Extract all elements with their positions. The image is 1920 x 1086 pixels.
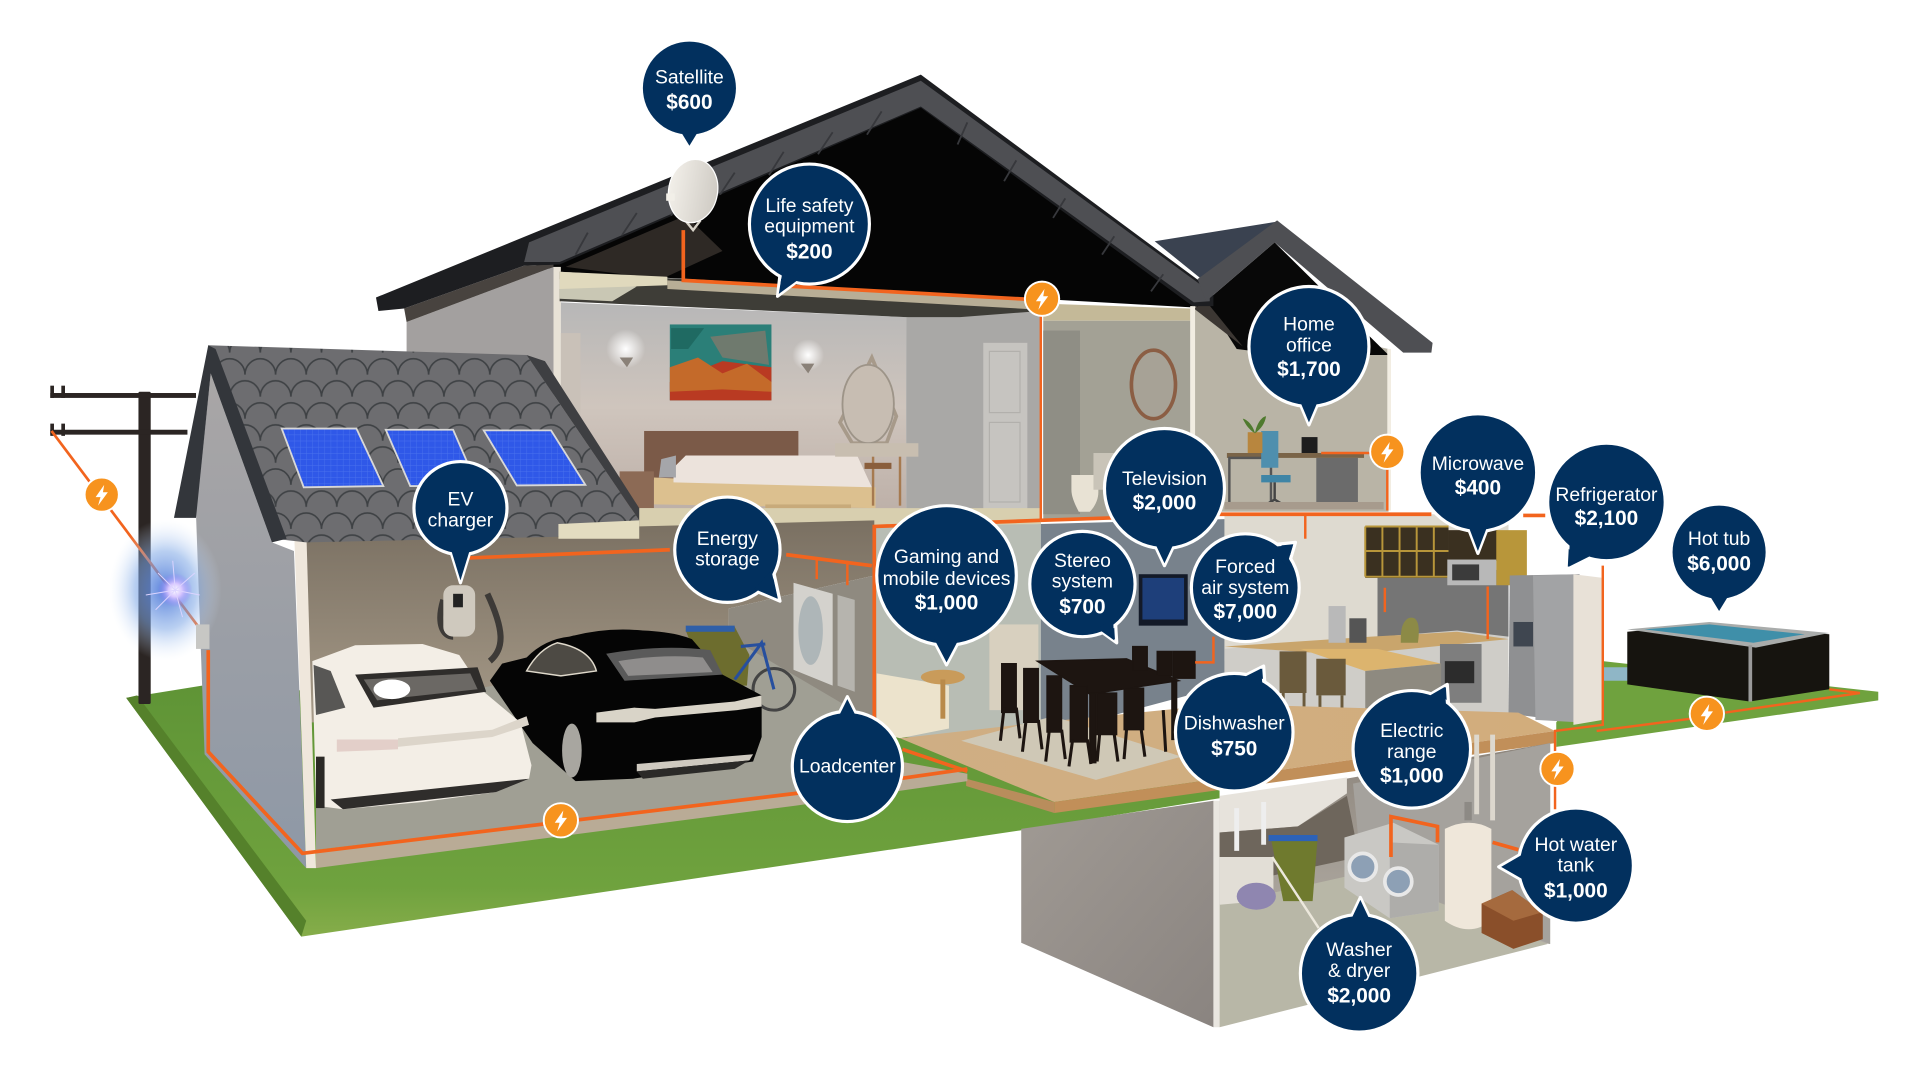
bedroom floor — [561, 508, 1041, 536]
bedroom floor edge over garage — [558, 520, 639, 539]
garage back wall — [306, 520, 874, 722]
bubble: Television — [1104, 429, 1224, 566]
bubble: Hot water tank — [1499, 808, 1633, 923]
bubble: Life safety equipment: Life safety — [765, 195, 854, 217]
bathroom — [1043, 304, 1190, 520]
bubble: Refrigerator: $2,100 — [1575, 507, 1638, 530]
wall lamps — [606, 329, 824, 373]
bubble: Washer and dryer: Washer — [1326, 939, 1393, 961]
bubble: Washer and dryer: & dryer — [1328, 960, 1391, 982]
bubble: Home office — [1249, 286, 1369, 425]
bubble: Energy storage — [675, 497, 780, 602]
bubble: Gaming and mobile devices: Gaming and — [894, 546, 999, 568]
bubble: Life safety equipment: equipment — [764, 216, 855, 238]
utility pole — [50, 386, 196, 704]
bubble: Loadcenter: Loadcenter — [799, 756, 896, 778]
round mirror — [1131, 350, 1175, 419]
satellite dish — [663, 155, 723, 230]
bubble: Hot water tank: tank — [1558, 855, 1594, 877]
electric spark at meter — [109, 519, 222, 661]
vacuum — [1237, 883, 1276, 910]
bubble: Life safety equipment — [749, 164, 869, 296]
bubble: Stereo system: Stereo — [1054, 550, 1111, 572]
bubble: Forced air system: Forced — [1215, 556, 1275, 578]
wall painting — [670, 324, 771, 400]
living room — [874, 524, 1041, 747]
bubble: Home office: office — [1286, 334, 1332, 356]
toilet — [1071, 475, 1098, 512]
bubble: Washer and dryer: $2,000 — [1327, 985, 1391, 1008]
lightning badge: home office — [1370, 435, 1404, 469]
bubble: EV charger: charger — [428, 509, 494, 531]
bubble: Gaming and mobile devices: $1,000 — [915, 592, 978, 615]
bubble: Dishwasher: $750 — [1211, 737, 1257, 760]
lightning badge: garage — [544, 803, 578, 837]
EV wall charger — [440, 585, 501, 661]
bubble: Satellite — [643, 42, 736, 146]
bubble: Hot water tank: $1,000 — [1544, 879, 1608, 902]
bubble: Microwave — [1419, 414, 1537, 553]
grass: right lawn — [1556, 661, 1878, 747]
refrigerator — [1509, 574, 1603, 725]
bubble: Dishwasher — [1175, 666, 1293, 791]
bubble: Electric range: range — [1387, 741, 1437, 763]
bubble: Hot water tank: Hot water — [1534, 834, 1618, 856]
bubble: Energy storage: Energy — [697, 528, 758, 550]
rug — [961, 716, 1182, 780]
bubble: Microwave: $400 — [1455, 477, 1501, 500]
main roof — [376, 75, 1213, 311]
trash bin — [1271, 839, 1318, 901]
attic and main gable — [529, 104, 1212, 309]
bubble: Life safety equipment: $200 — [786, 240, 833, 263]
black car — [490, 630, 762, 781]
lightning badge: power line — [85, 477, 119, 512]
bubble: Gaming and mobile devices: mobile devices — [883, 568, 1010, 590]
bubble: Stereo system: system — [1052, 571, 1113, 593]
home office furniture — [1224, 416, 1384, 509]
bubble: Home office: Home — [1283, 314, 1335, 336]
grass: main lawn — [126, 686, 1220, 937]
wing roof — [1155, 220, 1433, 353]
bubble: Loadcenter — [792, 697, 902, 822]
bed — [620, 431, 876, 514]
bubble: EV charger — [414, 462, 507, 583]
garage left wall — [196, 373, 316, 868]
dining room wall — [1041, 519, 1224, 735]
solar panels — [282, 429, 585, 487]
bubble: Television: Television — [1122, 468, 1207, 490]
hot tub — [1627, 622, 1829, 702]
bubble: Energy storage: storage — [695, 549, 760, 571]
kitchen island — [1280, 649, 1441, 737]
garage roof — [174, 345, 639, 542]
bedroom — [560, 272, 1041, 536]
bubble: Gaming and mobile devices — [877, 506, 1016, 665]
bubble: Television: $2,000 — [1133, 491, 1196, 514]
bubble: Hot tub: $6,000 — [1687, 553, 1751, 576]
bubble: Forced air system: air system — [1201, 577, 1289, 599]
hot water tank — [1445, 735, 1493, 929]
main house side wall — [404, 264, 561, 539]
bubble: Hot tub — [1673, 506, 1766, 611]
washer and dryer — [1344, 823, 1439, 918]
bubble: Refrigerator — [1548, 443, 1665, 569]
bubble: Home office: $1,700 — [1277, 358, 1341, 381]
basement — [1021, 735, 1550, 1027]
bubble: Stereo system: $700 — [1059, 595, 1106, 618]
mirror — [840, 358, 896, 443]
counter and appliances — [1224, 606, 1509, 735]
lightning badge: hot tub — [1690, 697, 1724, 731]
wood floor — [900, 704, 1555, 813]
dressing table — [835, 443, 918, 506]
kitchen cabinets — [1365, 526, 1527, 585]
bin and bicycle — [686, 626, 795, 710]
right wing wall — [1190, 242, 1391, 512]
white car — [312, 644, 531, 809]
wooden crate — [1482, 890, 1543, 949]
bubble: EV charger: EV — [448, 489, 473, 511]
bubble: Hot tub: Hot tub — [1688, 528, 1750, 550]
bubble: Electric range: $1,000 — [1380, 764, 1444, 787]
electrical wiring — [52, 230, 1860, 857]
kitchen — [1224, 514, 1603, 737]
bubble: Stereo system — [1030, 531, 1135, 643]
bubble: Dishwasher: Dishwasher — [1184, 713, 1285, 735]
bubble: Washer and dryer — [1300, 897, 1418, 1032]
bubble: Forced air system: $7,000 — [1213, 600, 1277, 623]
dining table and chairs — [1000, 646, 1195, 766]
bubble: Microwave: Microwave — [1432, 453, 1524, 475]
bubble: Satellite: $600 — [666, 91, 713, 114]
lightning badge: basement — [1540, 752, 1575, 786]
bubble: Forced air system — [1191, 534, 1299, 642]
lightning badge: attic — [1025, 282, 1059, 316]
bubble: Refrigerator: Refrigerator — [1555, 484, 1658, 506]
battery units on garage wall — [793, 583, 855, 692]
bubble: Electric range — [1353, 684, 1471, 808]
garage floor — [316, 637, 967, 868]
bubble: Electric range: Electric — [1380, 720, 1444, 742]
bubble: Satellite: Satellite — [655, 66, 724, 88]
